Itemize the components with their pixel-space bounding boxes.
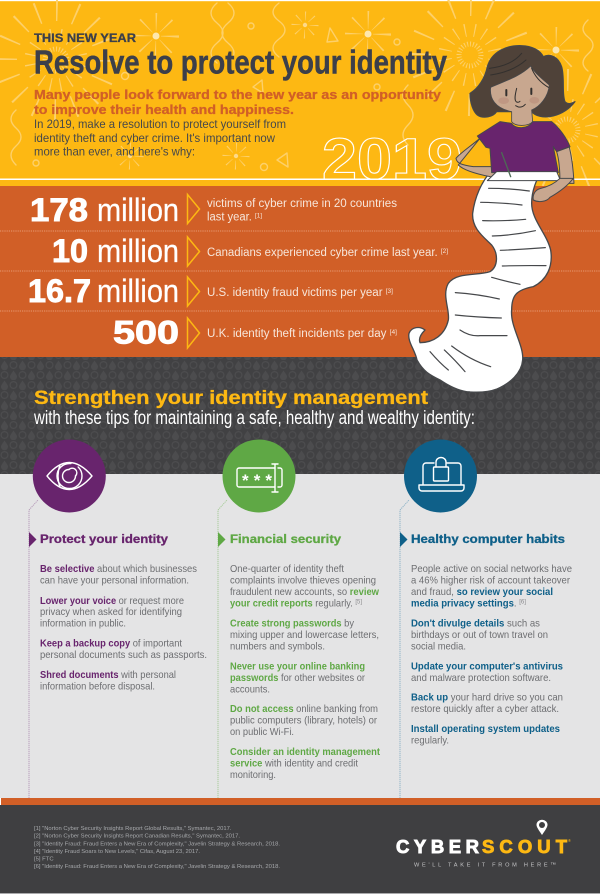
title: Resolve to protect your identity bbox=[34, 44, 448, 80]
intro body text: identity theft and cyber crime. It's important now bbox=[34, 131, 275, 145]
icon: laptop lock in blue circle bbox=[404, 440, 477, 512]
column: financial security: complaints involve thieves opening bbox=[230, 576, 376, 586]
panel: yellow header background bbox=[0, 0, 600, 186]
stat row: 178 million: million bbox=[97, 192, 179, 228]
column: financial security: fraudulent new accounts, so review bbox=[230, 587, 379, 598]
illustration: hand gripping scroll bbox=[533, 178, 573, 202]
stat row: 500: U.K. identity theft incidents per day bbox=[207, 328, 385, 340]
footnotes: [3] "Identity Fraud: Fraud Enters a New Era of Complexity," Javelin Strategy & Research, 2018. bbox=[34, 842, 280, 848]
column: protect your identity: personal documents such as passports. bbox=[40, 650, 207, 661]
column: protect your identity: Keep a backup copy of important bbox=[40, 639, 182, 650]
stat row: 10 million: Canadians experienced cyber crime last year. bbox=[207, 247, 440, 259]
logo: cyberscout: ® bbox=[568, 838, 571, 843]
column: financial security: Financial security bbox=[230, 532, 341, 546]
shirt bbox=[477, 122, 570, 173]
kicker: this new year: THIS NEW YEAR bbox=[34, 31, 136, 45]
outlined 2019: 2019 bbox=[322, 127, 462, 192]
stat row: 178 million: victims of cyber crime in 20 countries bbox=[207, 198, 397, 210]
column: healthy computer habits: People active on social networks have bbox=[411, 564, 572, 575]
column: financial security: monitoring. bbox=[230, 770, 276, 781]
illustration: woman holding scroll bbox=[456, 46, 575, 183]
intro highlight: to improve their health and happiness. bbox=[34, 103, 294, 117]
column: protect your identity: information before disposal. bbox=[40, 682, 155, 692]
column: protect your identity: privacy when asked for identifying bbox=[40, 607, 182, 618]
column: financial security: service with identity and credit bbox=[230, 758, 358, 770]
column: healthy computer habits: a 46% higher risk of account takeover bbox=[411, 576, 571, 586]
column: financial security: [5] bbox=[355, 598, 362, 605]
stat row: 10 million: million bbox=[97, 233, 179, 269]
decorative fireworks and squiggles bbox=[6, 3, 600, 180]
stat row: 16.7 million: million bbox=[97, 273, 179, 309]
column: protect your identity: Lower your voice or request more bbox=[40, 596, 184, 607]
facial features bbox=[489, 53, 548, 107]
column: financial security: your credit reports regularly. bbox=[230, 598, 357, 609]
logo: cyberscout: SCOUT bbox=[482, 836, 568, 857]
footnotes: [5] FTC bbox=[34, 856, 54, 862]
subheading: with these tips for maintaining a safe, healthy and wealthy identity: bbox=[33, 408, 475, 429]
stat row: 10 million: [2] bbox=[441, 248, 448, 255]
logo: cyberscout: WE'LL TAKE IT FROM HERE™ bbox=[414, 863, 556, 869]
column: protect your identity: information in public. bbox=[40, 618, 126, 630]
stat row: 16.7 million: 16.7 bbox=[28, 273, 91, 309]
column: financial security bbox=[218, 500, 381, 798]
intro body text: In 2019, make a resolution to protect yourself from bbox=[34, 117, 286, 131]
column: healthy computer habits: media privacy settings. bbox=[411, 598, 521, 609]
footnotes: [4] "Identity Fraud Soars to New Levels," Cifas, August 23, 2017. bbox=[34, 849, 200, 855]
column: protect your identity: Be selective about which businesses bbox=[40, 564, 197, 575]
column: financial security: mixing upper and lowercase letters, bbox=[230, 630, 379, 641]
paper top bbox=[487, 172, 561, 181]
column: healthy computer habits: Back up your hard drive so you can bbox=[411, 693, 563, 704]
stat row: 178 million: [1] bbox=[255, 212, 262, 220]
column: financial security: Do not access online banking from bbox=[230, 704, 378, 715]
icon: eye in purple circle bbox=[33, 440, 106, 512]
icon: password field in green circle: *** bbox=[242, 471, 272, 490]
column: financial security: Consider an identity management bbox=[230, 747, 381, 758]
column: healthy computer habits: Healthy computer habits bbox=[411, 532, 565, 546]
column: healthy computer habits: regularly. bbox=[411, 736, 449, 746]
column: healthy computer habits: Install operating system updates bbox=[411, 724, 560, 735]
icon: password field in green circle bbox=[222, 440, 296, 512]
column: healthy computer habits: and fraud, so review your social bbox=[411, 587, 553, 598]
footnotes: [2] "Norton Cyber Security Insights Report Canadian Results," Symantec, 2017. bbox=[34, 834, 240, 840]
column: financial security: Create strong passwords by bbox=[230, 619, 355, 630]
stat row: 16.7 million bbox=[28, 273, 393, 309]
stat row: 500: [4] bbox=[390, 329, 397, 336]
logo: cyberscout: CYBER bbox=[396, 836, 479, 857]
intro highlight: Many people look forward to the new year as an opportunity bbox=[34, 88, 441, 102]
column: healthy computer habits: social media. bbox=[411, 641, 466, 652]
panel: grey tips background bbox=[0, 474, 600, 798]
panel: dark patterned band bbox=[0, 357, 600, 474]
bottom edge bbox=[0, 893, 600, 894]
intro highlight bbox=[34, 88, 441, 117]
neck and face bbox=[490, 66, 549, 125]
logo: cyberscout bbox=[396, 820, 571, 869]
column: healthy computer habits bbox=[400, 500, 572, 798]
stat row: 500: 500 bbox=[113, 314, 179, 350]
intro body text bbox=[34, 117, 286, 158]
column: healthy computer habits: birthdays or out of town travel on bbox=[411, 630, 548, 641]
column: financial security: numbers and symbols. bbox=[230, 641, 325, 652]
hair back bbox=[470, 46, 575, 117]
column: protect your identity bbox=[29, 500, 207, 798]
white rule bbox=[0, 178, 600, 180]
arm left bbox=[456, 138, 512, 178]
column: protect your identity: Shred documents with personal bbox=[40, 670, 176, 681]
stat row: 16.7 million: U.S. identity fraud victims per year bbox=[207, 287, 382, 299]
panel: orange statistics band bbox=[0, 186, 600, 357]
stat row: 500 bbox=[113, 314, 397, 350]
footnotes: [6] "Identity Fraud: Fraud Enters a New Era of Complexity," Javelin Strategy & Research, 2018. bbox=[34, 864, 280, 870]
column: financial security: on public Wi-Fi. bbox=[230, 727, 294, 738]
arm right bbox=[557, 147, 574, 183]
intro body text: more than ever, and here's why: bbox=[34, 144, 195, 158]
column: financial security: passwords for other websites or bbox=[230, 673, 366, 684]
column: healthy computer habits: [6] bbox=[519, 598, 526, 605]
column: financial security: accounts. bbox=[230, 684, 270, 695]
illustration: paper scroll bbox=[409, 170, 551, 392]
pen bbox=[502, 153, 511, 177]
column: healthy computer habits: Update your computer's antivirus bbox=[411, 661, 563, 672]
stat row: 10 million bbox=[52, 233, 448, 269]
column: financial security: One-quarter of identity theft bbox=[230, 564, 344, 575]
stat row: 178 million: 178 bbox=[30, 192, 88, 228]
stat row: 178 million bbox=[30, 192, 397, 228]
heading: strengthen your identity management: Strengthen your identity management bbox=[34, 388, 429, 409]
stat row: 178 million: last year. bbox=[207, 212, 253, 224]
column: protect your identity: can have your personal information. bbox=[40, 576, 189, 586]
column: financial security: Never use your online banking bbox=[230, 661, 365, 672]
cheeks bbox=[498, 97, 539, 104]
column: financial security: public computers (library, hotels) or bbox=[230, 716, 378, 726]
stat row: 10 million: 10 bbox=[52, 233, 88, 269]
column: protect your identity: Protect your identity bbox=[40, 532, 168, 546]
column: healthy computer habits: restore quickly after a cyber attack. bbox=[411, 704, 559, 715]
stat row: 16.7 million: [3] bbox=[386, 288, 393, 295]
footnotes bbox=[34, 826, 280, 870]
column: healthy computer habits: Don't divulge details such as bbox=[411, 619, 540, 630]
footnotes: [1] "Norton Cyber Security Insights Report Global Results," Symantec, 2017. bbox=[34, 826, 232, 832]
orange footer rule bbox=[1, 798, 600, 805]
column: healthy computer habits: and malware protection software. bbox=[411, 673, 551, 684]
panel: dark footer bbox=[0, 805, 600, 893]
